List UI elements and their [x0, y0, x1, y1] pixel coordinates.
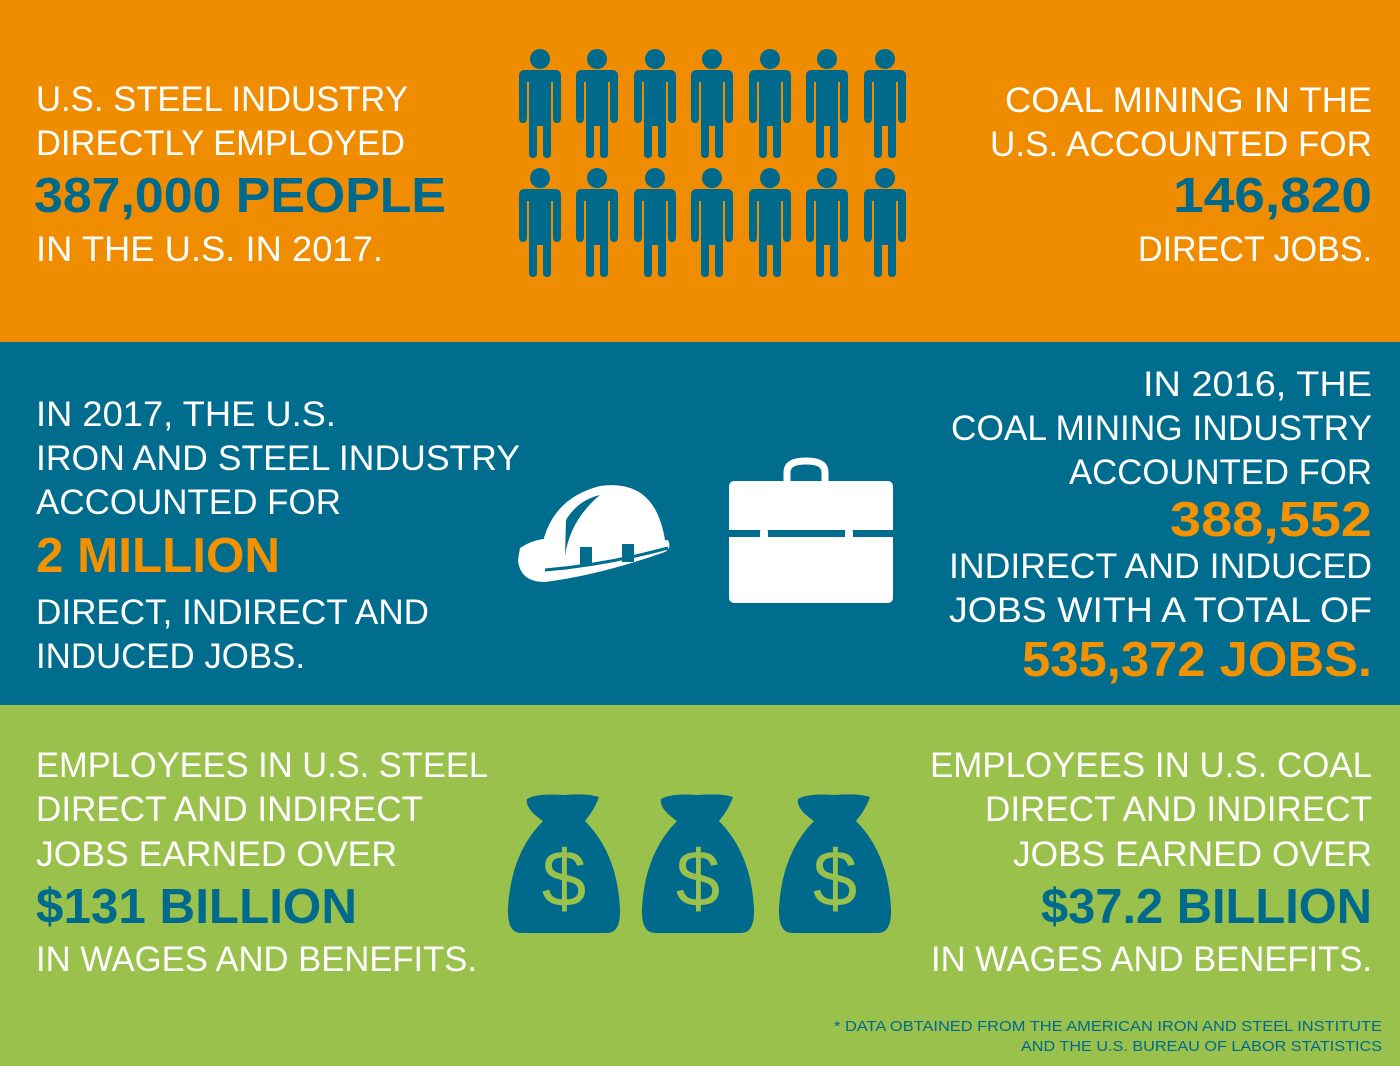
- text: steel total jobs: DIRECT, INDIRECT AND: [36, 593, 429, 632]
- footnote: AND THE U.S. BUREAU OF LABOR STATISTICS: [1021, 1038, 1382, 1055]
- text: steel wages: DIRECT AND INDIRECT: [36, 790, 423, 829]
- text: steel wages: EMPLOYEES IN U.S. STEEL: [36, 746, 488, 785]
- text: coal wages: EMPLOYEES IN U.S. COAL: [930, 746, 1372, 785]
- text: steel total jobs: IN 2017, THE U.S.: [36, 395, 336, 434]
- text: steel direct employment: [34, 80, 446, 269]
- text: coal total jobs: 388,552: [1170, 493, 1372, 547]
- icon: people grid: [519, 49, 906, 277]
- text: steel direct employment: U.S. STEEL INDUSTRY: [36, 80, 408, 119]
- text: coal direct jobs: COAL MINING IN THE: [1005, 81, 1372, 120]
- text: coal wages: $37.2 BILLION: [1041, 880, 1372, 934]
- text: coal total jobs: 535,372 JOBS.: [1022, 633, 1372, 687]
- text: coal direct jobs: [990, 81, 1372, 269]
- icon: briefcase: [729, 461, 893, 603]
- panel: blue middle: [0, 342, 1400, 705]
- text: steel direct employment: DIRECTLY EMPLOYED: [36, 124, 405, 163]
- text: steel total jobs: INDUCED JOBS.: [36, 637, 305, 676]
- text: coal total jobs: IN 2016, THE: [1143, 365, 1372, 404]
- text: steel direct employment: 387,000 PEOPLE: [34, 169, 446, 223]
- text: coal direct jobs: 146,820: [1173, 169, 1372, 223]
- text: coal wages: JOBS EARNED OVER: [1013, 835, 1372, 874]
- icon: money bags: $: [676, 834, 720, 923]
- text: coal total jobs: INDIRECT AND INDUCED: [949, 547, 1372, 586]
- text: steel total jobs: [36, 395, 520, 676]
- text: steel wages: IN WAGES AND BENEFITS.: [36, 940, 477, 979]
- text: coal total jobs: [949, 365, 1372, 687]
- icon: hard hat: [518, 485, 669, 582]
- text: coal wages: [930, 746, 1372, 979]
- icon: money bags: [508, 794, 891, 933]
- text: steel wages: JOBS EARNED OVER: [36, 835, 397, 874]
- text: steel total jobs: ACCOUNTED FOR: [36, 483, 341, 522]
- text: steel direct employment: IN THE U.S. IN 2017.: [36, 230, 383, 269]
- text: coal direct jobs: U.S. ACCOUNTED FOR: [990, 125, 1372, 164]
- icon: money bags: $: [813, 834, 857, 923]
- text: steel total jobs: IRON AND STEEL INDUSTRY: [36, 439, 520, 478]
- panel: green bottom: [0, 705, 1400, 1066]
- text: coal total jobs: JOBS WITH A TOTAL OF: [949, 591, 1372, 630]
- footnote: * DATA OBTAINED FROM THE AMERICAN IRON AND STEEL INSTITUTE: [834, 1018, 1382, 1035]
- text: steel wages: [36, 746, 488, 979]
- text: coal wages: IN WAGES AND BENEFITS.: [931, 940, 1372, 979]
- text: coal total jobs: ACCOUNTED FOR: [1069, 453, 1372, 492]
- text: coal wages: DIRECT AND INDIRECT: [985, 790, 1372, 829]
- text: coal direct jobs: DIRECT JOBS.: [1138, 230, 1372, 269]
- text: steel total jobs: 2 MILLION: [36, 529, 280, 583]
- icon: money bags: $: [542, 834, 586, 923]
- footnote: [834, 1018, 1382, 1055]
- panel: orange top: [0, 0, 1400, 342]
- text: steel wages: $131 BILLION: [36, 880, 357, 934]
- text: coal total jobs: COAL MINING INDUSTRY: [951, 409, 1372, 448]
